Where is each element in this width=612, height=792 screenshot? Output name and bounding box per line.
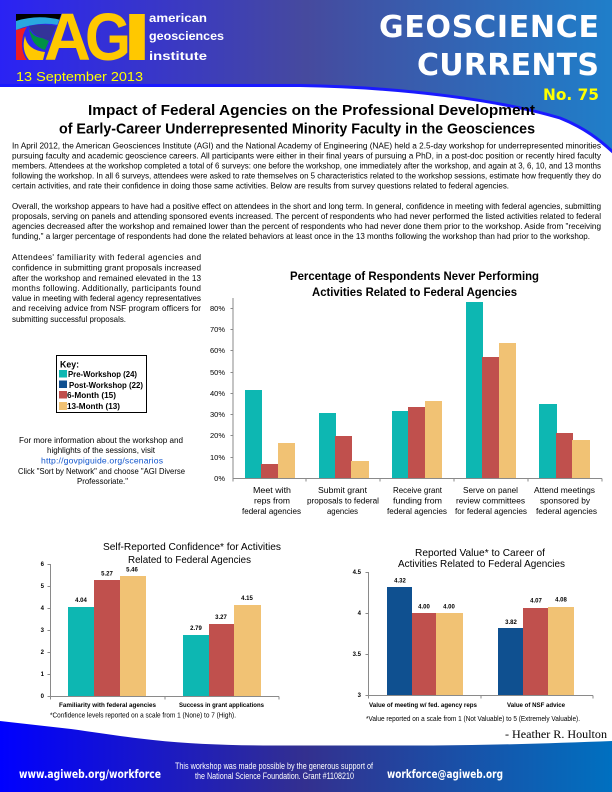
- value labels: 4.04: [75, 598, 87, 604]
- value labels: 4.07: [530, 599, 542, 605]
- category labels: Value of meeting w/ fed. agency reps: [369, 703, 478, 709]
- chart title: [290, 271, 539, 299]
- chart title: Activities Related to Federal Agencies: [398, 558, 565, 570]
- bars: grant success: [183, 605, 261, 696]
- value labels: [394, 578, 567, 626]
- y axis labels: 20%: [210, 431, 225, 440]
- intro paragraph: In April 2012, the American Geosciences Institute (AGI) and the National Academy of Engineering (NAE) held a 2.5-day workshop for underrepresented minorities: [12, 140, 601, 150]
- y axis labels: 5: [41, 584, 45, 590]
- category labels: federal agencies: [387, 507, 447, 516]
- logo letters: A: [44, 0, 91, 75]
- legend: post-workshop: Post-Workshop (22): [69, 381, 143, 390]
- footer funding note: the National Science Foundation. Grant #1108210: [195, 771, 354, 781]
- chart title: [103, 541, 281, 566]
- category labels: federal agencies: [536, 507, 597, 516]
- masthead title: GEOSCIENCE: [379, 10, 599, 45]
- chart title: [398, 547, 565, 570]
- y axis labels: 3: [358, 693, 362, 699]
- value labels: 4.15: [241, 596, 253, 602]
- value labels: 4.00: [418, 605, 430, 611]
- y axis labels: 4.5: [353, 570, 362, 576]
- article heading: Impact of Federal Agencies on the Professional Development: [88, 102, 535, 119]
- value labels: [75, 568, 253, 632]
- more information note: [18, 435, 185, 486]
- value labels: 4.08: [555, 598, 567, 604]
- header banner: [0, 0, 612, 154]
- category labels: Success in grant applications: [179, 703, 265, 709]
- category labels: [369, 703, 566, 709]
- bar chart: reported value: [353, 547, 593, 723]
- y axis labels: 40%: [210, 389, 225, 398]
- legend key: Key:: [60, 360, 79, 370]
- side text block: value in meeting with federal agency representatives: [12, 294, 201, 303]
- bar chart: self-reported confidence: [41, 541, 281, 720]
- value labels: 2.79: [190, 626, 202, 632]
- logo letters: G: [85, 0, 131, 75]
- footer email: workforce@agiweb.org: [387, 767, 503, 781]
- logo wordmark: institute: [149, 51, 207, 63]
- bars: receive grant funding: [392, 401, 442, 478]
- category labels: proposals to federal: [307, 496, 379, 506]
- category labels: [59, 703, 265, 709]
- y axis labels: 50%: [210, 368, 225, 377]
- date: 13 September 2013: [16, 69, 143, 84]
- value labels: 4.00: [443, 605, 455, 611]
- category labels: Serve on panel: [463, 486, 518, 495]
- logo letters: I: [122, 0, 152, 75]
- chart title: Related to Federal Agencies: [128, 554, 251, 566]
- footer funding note: This workshop was made possible by the generous support of: [175, 761, 373, 771]
- category labels: reps from: [254, 496, 290, 506]
- side text block: and receiving advice from NSF program officers for: [12, 304, 201, 313]
- y axis labels: 2: [41, 650, 45, 656]
- category labels: Receive grant: [393, 486, 443, 495]
- bars: serve on review committees: [466, 302, 516, 478]
- y axis labels: 4: [41, 606, 45, 612]
- masthead title: CURRENTS: [417, 48, 599, 83]
- value labels: 3.82: [505, 620, 517, 626]
- chart title: Activities Related to Federal Agencies: [312, 287, 517, 299]
- side text block: [12, 253, 201, 324]
- category labels: funding from: [393, 496, 442, 506]
- more information note: http://govpiguide.org/scenarios: [41, 456, 163, 466]
- logo letters: [44, 0, 152, 75]
- category labels: for federal agencies: [455, 507, 527, 516]
- value labels: 5.27: [101, 572, 113, 578]
- intro paragraph: [12, 140, 602, 190]
- bars: familiarity: [68, 576, 146, 696]
- more information note: Professoriate.": [77, 476, 128, 486]
- side text block: after the workshop and remained elevated in the 13: [12, 274, 201, 283]
- axes: [48, 564, 279, 700]
- side text block: submitting successful proposals.: [12, 315, 126, 324]
- intro paragraph: pursuing faculty and academic geoscience careers. All participants were either in their final years of pursuing a PhD, in a post-doc position or recently hired faculty: [12, 150, 602, 160]
- category labels: review committees: [456, 496, 525, 506]
- category labels: federal agencies: [242, 507, 301, 516]
- legend key: [56, 356, 146, 412]
- footer website: www.agiweb.org/workforce: [19, 767, 161, 781]
- y axis labels: [353, 570, 362, 699]
- bars: meeting value: [387, 587, 463, 695]
- bars: submit grant proposals: [319, 413, 369, 478]
- article heading: of Early-Career Underrepresented Minority Faculty in the Geosciences: [59, 120, 535, 138]
- side text block: confidence in submitting grant proposals increased: [12, 264, 201, 272]
- masthead title: [379, 10, 599, 83]
- logo wordmark: geosciences: [149, 31, 224, 43]
- more information note: Click "Sort by Network" and choose "AGI Diverse: [18, 466, 185, 476]
- bars: attend sponsored meetings: [539, 404, 590, 478]
- category labels: sponsored by: [540, 496, 590, 506]
- side text block: months following. Additionally, participants found: [12, 284, 201, 293]
- value labels: 3.27: [215, 615, 227, 621]
- legend: 13-month: 13-Month (13): [67, 402, 120, 411]
- y axis labels: [210, 304, 225, 483]
- icon: AGI logo: [16, 0, 152, 75]
- y axis labels: 3: [41, 628, 45, 634]
- y axis labels: 30%: [210, 410, 225, 419]
- y axis labels: 60%: [210, 346, 225, 355]
- y axis labels: 70%: [210, 325, 225, 334]
- footnote: *Value reported on a scale from 1 (Not Valuable) to 5 (Extremely Valuable).: [366, 716, 580, 723]
- overall findings paragraph: [12, 201, 601, 241]
- category labels: Attend meetings: [534, 486, 595, 495]
- category labels: agencies: [327, 507, 358, 516]
- category labels: Submit grant: [318, 486, 368, 495]
- value labels: 5.46: [126, 568, 138, 574]
- legend: pre-workshop: Pre-Workshop (24): [68, 370, 137, 379]
- intro paragraph: certain activities, and rate their confidence in doing those same activities. Below are results from survey questions related to federal agencies.: [12, 180, 509, 190]
- category labels: [242, 486, 597, 516]
- y axis labels: 1: [41, 672, 45, 678]
- y axis labels: 3.5: [353, 652, 362, 658]
- y axis labels: [41, 562, 45, 700]
- footnote: *Confidence levels reported on a scale from 1 (None) to 7 (High).: [50, 712, 236, 720]
- bars: meet with reps: [245, 390, 295, 478]
- logo wordmark: [149, 13, 224, 63]
- footer funding note: [175, 761, 373, 781]
- author credit: - Heather R. Houlton: [505, 727, 607, 741]
- y axis labels: 80%: [210, 304, 225, 313]
- value labels: 4.32: [394, 578, 406, 584]
- y axis labels: 6: [41, 562, 45, 568]
- more information note: highlights of the sessions, visit: [47, 445, 156, 455]
- category labels: Meet with: [253, 486, 291, 495]
- axes: [366, 572, 593, 698]
- legend: 6-month: 6-Month (15): [67, 391, 116, 400]
- chart title: Percentage of Respondents Never Performing: [290, 271, 539, 283]
- article heading: [59, 102, 535, 138]
- category labels: Value of NSF advice: [507, 703, 566, 709]
- y axis labels: 0%: [214, 474, 225, 483]
- chart title: Reported Value* to Career of: [415, 547, 545, 559]
- axes: [230, 298, 602, 482]
- issue number: No. 75: [543, 85, 599, 104]
- y axis labels: 10%: [210, 453, 225, 462]
- side text block: Attendees' familiarity with federal agencies and: [12, 253, 201, 262]
- more information note: For more information about the workshop and: [19, 435, 183, 445]
- logo wordmark: american: [149, 13, 207, 25]
- bars: NSF advice value: [498, 607, 574, 695]
- footer banner: [0, 721, 612, 792]
- y axis labels: 0: [41, 694, 45, 700]
- overall findings paragraph: funding," a larger percentage of respondents had done the related behaviors at least once in the 13 months following the workshop than had prior to the workshop.: [12, 231, 590, 241]
- category labels: Familiarity with federal agencies: [59, 703, 157, 709]
- chart title: Self-Reported Confidence* for Activities: [103, 541, 281, 553]
- y axis labels: 4: [358, 611, 362, 617]
- bar chart: never performing activities: [210, 271, 602, 516]
